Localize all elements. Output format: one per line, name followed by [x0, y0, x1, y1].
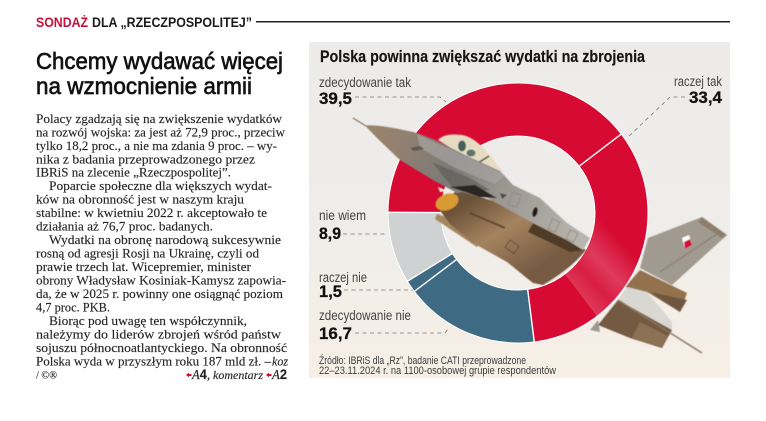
article body text: nika z badania przeprowadzonego przez	[36, 151, 255, 166]
donut chart	[373, 68, 663, 358]
data label: nie wiem	[319, 208, 385, 243]
article body text: 4,7 proc. PKB.	[36, 299, 110, 314]
data label: zdecydowanie nie: 16,7	[319, 325, 352, 343]
section kicker: SONDAŻ	[36, 15, 88, 30]
article body text	[36, 111, 288, 368]
data label: raczej tak: 33,4	[689, 89, 723, 107]
source note: 22–23.11.2024 r. na 1100-osobowej grupie respondentów	[319, 365, 556, 377]
article body text: prawie trzech lat. Wicepremier, minister	[36, 259, 252, 274]
author line and cross references: komentarz	[213, 368, 263, 382]
article body text: stabilne: w kwietniu 2022 r. akceptowało te	[36, 205, 267, 220]
headline	[36, 48, 283, 99]
data label: zdecydowanie nie: zdecydowanie nie	[319, 308, 411, 323]
article body text: tylko 18,2 proc., a nie ma zdania 9 proc. – wy-	[36, 138, 277, 153]
headline: na wzmocnienie armii	[36, 73, 252, 99]
fighter jet: fuselage in front of the ring	[353, 118, 590, 285]
chart title: Polska powinna zwiększać wydatki na zbrojenia	[320, 48, 646, 66]
data label: raczej tak: raczej tak	[674, 74, 722, 89]
article body text: obrony Władysław Kosiniak-Kamysz zapowia-	[36, 272, 286, 287]
headline: Chcemy wydawać więcej	[36, 48, 283, 74]
article body text: Wydatki na obronę narodową sukcesywnie	[49, 232, 281, 247]
article body text: Polacy zgadzają się na zwiększenie wydatków	[36, 111, 283, 126]
article body text: Biorąc pod uwagę ten współczynnik,	[49, 313, 247, 328]
panel: survey chart	[309, 42, 730, 378]
article body text: ków na obronność jest w naszym kraju	[36, 192, 245, 206]
data label: raczej nie: raczej nie	[319, 270, 367, 285]
article body text: IBRiS na zlecenie „Rzeczpospolitej”.	[36, 165, 231, 180]
data label: zdecydowanie tak: zdecydowanie tak	[319, 75, 411, 90]
article body text: rosną od agresji Rosji na Ukrainę, czyli od	[36, 246, 259, 261]
article body text: koz	[272, 353, 288, 368]
article body text: Polska wyda w przyszłym roku 187 mld zł. –	[36, 353, 271, 368]
source note: Źródło: IBRiS dla „Rz”, badanie CATI przeprowadzone	[319, 354, 526, 367]
article body text: na rozwój wojska: za jest aż 72,9 proc., przeciw	[36, 124, 286, 139]
section kicker	[36, 15, 730, 30]
data label: zdecydowanie tak: 39,5	[319, 90, 352, 108]
author line and cross references	[36, 367, 287, 382]
data label: nie wiem: 8,9	[319, 225, 341, 243]
author line and cross references: A4,	[191, 367, 210, 382]
author line and cross references: / ©®	[36, 370, 57, 382]
article body text: sojuszu północnoatlantyckiego. Na obronność	[36, 340, 287, 355]
article body text: Poparcie społeczne dla większych wydat-	[49, 178, 272, 193]
source note	[319, 354, 556, 377]
data label: zdecydowanie tak	[319, 75, 446, 108]
article body text: należymy do liderów zbrojeń wśród państw	[36, 326, 282, 341]
fighter jet: tail and wing behind the ring	[590, 217, 727, 353]
author line and cross references: A2	[271, 367, 287, 382]
data label: nie wiem: nie wiem	[319, 208, 366, 223]
article body text: da, że w 2025 r. powinny one osiągnąć poziom	[36, 286, 283, 301]
data label: zdecydowanie nie	[319, 308, 448, 343]
data label: raczej tak	[627, 74, 723, 138]
data label: raczej nie: 1,5	[319, 283, 342, 301]
section kicker: DLA „RZECZPOSPOLITEJ”	[92, 15, 252, 30]
data label: raczej nie	[319, 270, 413, 301]
article body text: działania aż 76,7 proc. badanych.	[36, 218, 213, 233]
